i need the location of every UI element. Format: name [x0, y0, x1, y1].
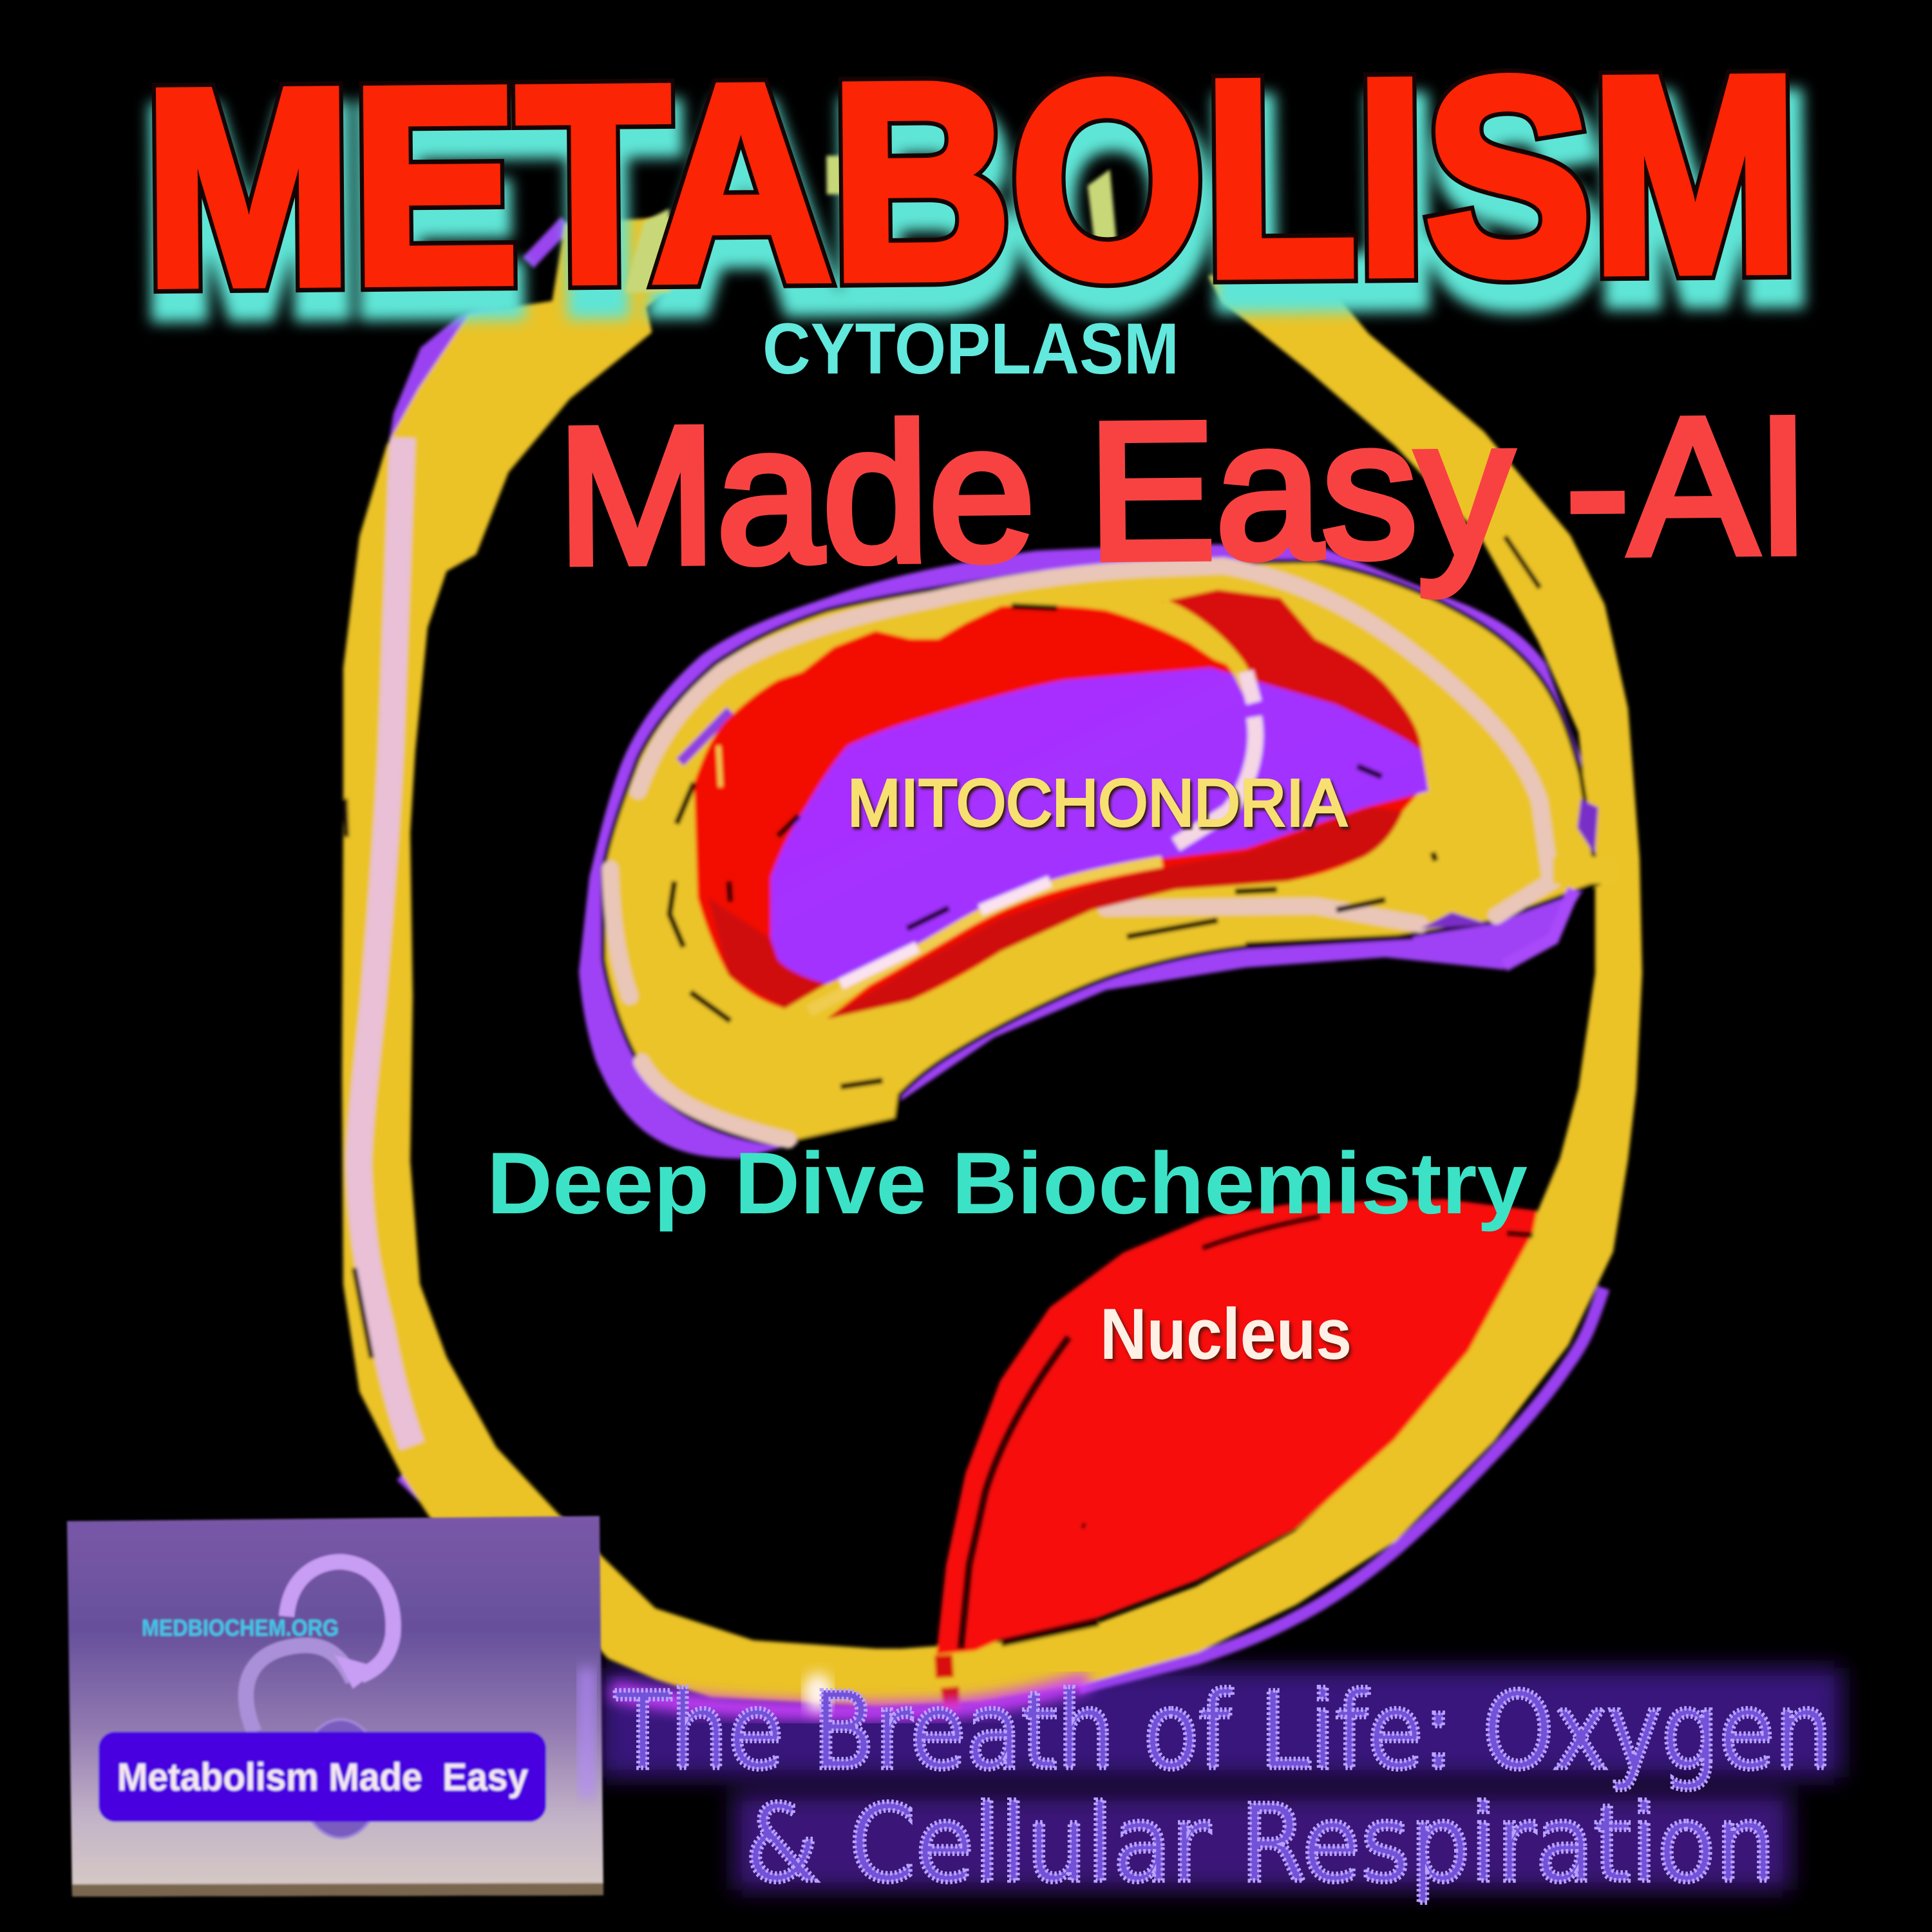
red cristae left part	[694, 605, 1427, 1019]
logo banner text: Metabolism Made Easy	[117, 1756, 529, 1799]
logo panel	[67, 1516, 603, 1897]
bright spot on rim	[804, 1673, 832, 1712]
small yellow streak on red	[719, 746, 721, 787]
yellow curved membrane	[1162, 606, 1251, 692]
pale highlights on inner membrane	[611, 566, 1551, 1140]
cell diagram	[344, 219, 1640, 1710]
mitochondrion purple outer membrane	[579, 545, 1587, 1159]
red cristae right part	[1162, 590, 1427, 782]
heading: breath of life	[614, 1669, 1832, 1906]
logo upper cycle arrow	[287, 1562, 393, 1676]
purple membrane top left	[388, 299, 509, 446]
logo right edge glow	[578, 1668, 595, 1797]
nucleus red body	[936, 1199, 1537, 1654]
label: mitochondria: MITOCHONDRIA	[848, 766, 1347, 840]
lower inner membrane streak	[810, 862, 1162, 1010]
logo banner	[99, 1732, 546, 1822]
lower inner membrane highlight	[840, 882, 1050, 984]
label: cytoplasm: CYTOPLASM	[762, 308, 1179, 389]
nucleus	[936, 1199, 1537, 1710]
purple membrane lower right	[1079, 1288, 1604, 1688]
black flecks	[670, 606, 1435, 1086]
logo background	[67, 1516, 603, 1897]
logo middle cycle arc	[246, 1645, 353, 1732]
label: deep dive biochemistry: Deep Dive Biochemistry	[487, 1134, 1528, 1232]
logo arrowhead	[335, 1655, 380, 1689]
label: nucleus: Nucleus	[1100, 1294, 1352, 1374]
pale streak on cell wall	[359, 438, 412, 1446]
glow panel: respiration heading backing	[599, 1668, 1842, 1890]
mitochondrion yellow intermembrane	[603, 561, 1598, 1144]
nucleus red tick on cell wall	[943, 1655, 952, 1710]
pale curved membrane	[1176, 672, 1256, 844]
darker lower cristae band	[708, 808, 1403, 1019]
title: metabolism	[144, 18, 1809, 368]
purple mitochondrial matrix	[771, 668, 1428, 984]
dark flecks on cell wall	[345, 536, 1540, 1358]
purple sliver left of cristae	[680, 711, 730, 762]
nucleus dark flecks	[1082, 1217, 1533, 1526]
nucleus dark inner outline	[961, 1337, 1069, 1649]
cell membrane: outer cell outline	[344, 219, 1640, 1705]
nucleus dark gap near base	[1001, 1623, 1099, 1643]
heading line two: & Cellular Respiration	[745, 1782, 1776, 1906]
purple arrow head on membrane	[1504, 889, 1574, 965]
purple notches on membrane	[1420, 799, 1598, 929]
glowing pink rim along the cell base	[612, 1681, 1088, 1711]
logo url text: MEDBIOCHEM.ORG	[142, 1615, 339, 1641]
logo lower cycle arc	[299, 1719, 382, 1838]
purple membrane lower left	[403, 1473, 444, 1513]
mitochondrion	[579, 545, 1616, 1159]
yellow cell wall seen through the title	[623, 153, 1117, 293]
purple membrane fragment behind title	[528, 222, 567, 263]
logo wood strip	[72, 1883, 603, 1897]
yellow bridge to cell wall	[1553, 857, 1616, 884]
subtitle text: Made Easy -AI	[556, 377, 1811, 606]
yellow cell wall	[344, 219, 1640, 1705]
